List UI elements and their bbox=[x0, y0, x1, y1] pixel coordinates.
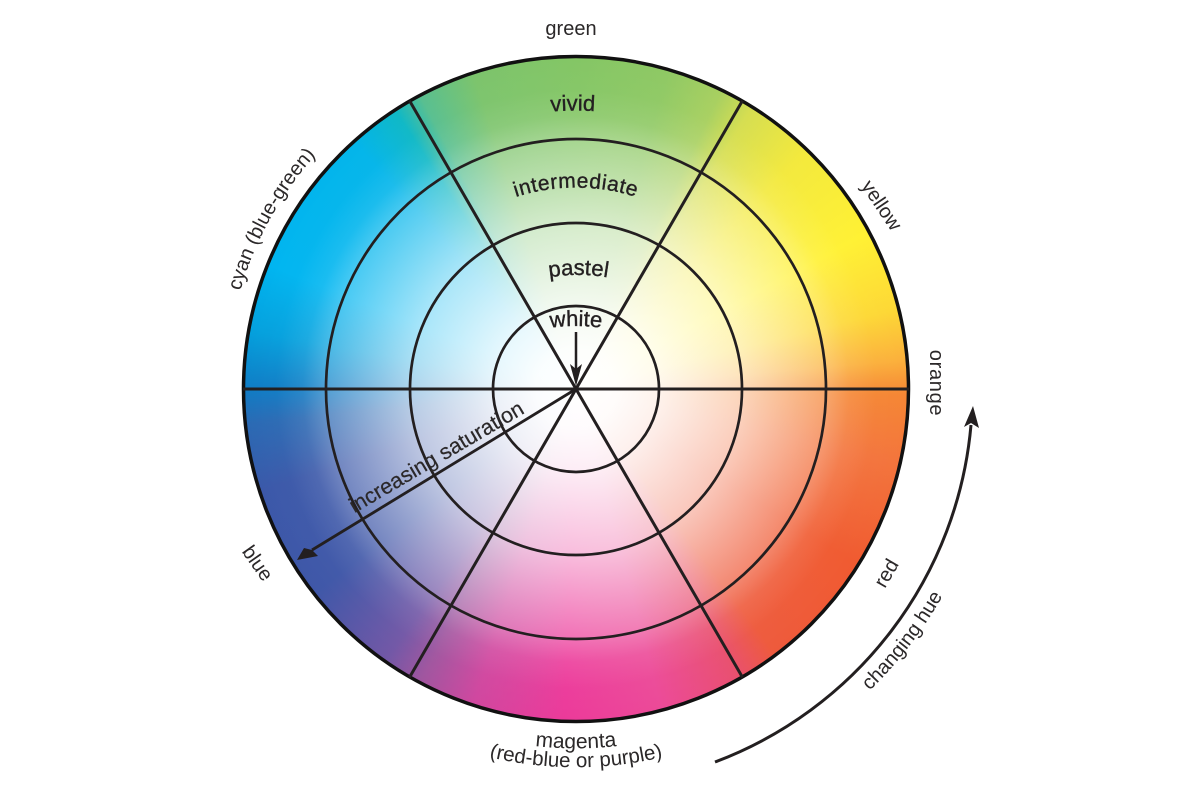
colour wheel hue fill bbox=[243, 56, 909, 722]
saturation level labels bbox=[512, 94, 637, 328]
label: increasing saturation: increasing saturation bbox=[345, 396, 528, 518]
arrow: increasing saturation bbox=[297, 389, 576, 560]
wheel rings and spokes bbox=[243, 56, 909, 722]
label: yellow: yellow bbox=[857, 176, 906, 235]
label: magenta: magenta bbox=[536, 734, 617, 753]
label: blue: blue bbox=[237, 542, 277, 585]
label: intermediate: intermediate bbox=[512, 173, 637, 197]
arrow: towards white centre bbox=[570, 332, 582, 386]
label: white: white bbox=[549, 310, 602, 328]
colour wheel saturation fade bbox=[243, 56, 909, 722]
label: green: green bbox=[545, 18, 597, 40]
label: vivid: vivid bbox=[550, 94, 594, 112]
label: orange: orange bbox=[925, 350, 947, 416]
label: cyan (blue-green): cyan (blue-green) bbox=[231, 149, 316, 289]
label: magenta: (red-blue or purple) bbox=[491, 744, 661, 771]
label: red: red bbox=[870, 555, 904, 592]
label: pastel: pastel bbox=[549, 260, 609, 282]
arrow: changing hue bbox=[715, 406, 979, 762]
label: changing hue: changing hue bbox=[864, 592, 941, 688]
